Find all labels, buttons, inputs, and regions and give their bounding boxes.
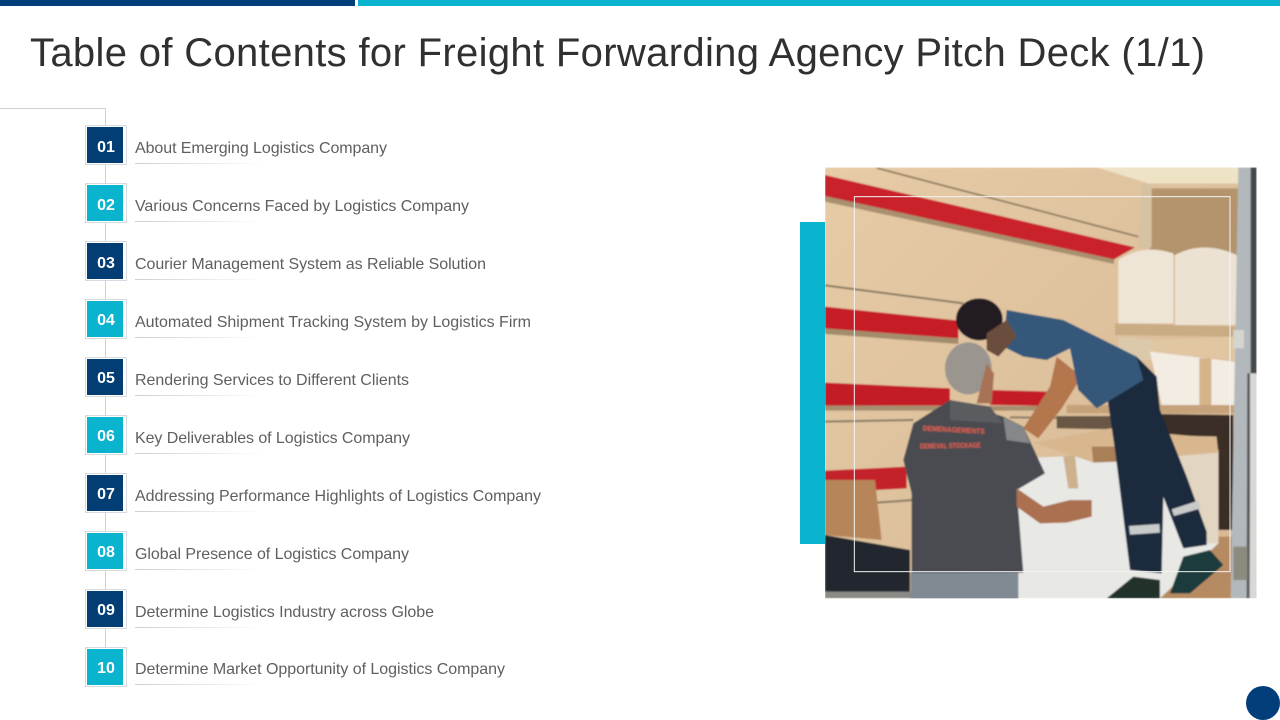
item 08: Global Presence of Logistics Company: [135, 546, 409, 563]
item 02: Various Concerns Faced by Logistics Company: [135, 198, 469, 215]
item 08: 08: [97, 544, 115, 561]
item 05: [86, 358, 409, 396]
item 09: 09: [97, 602, 115, 619]
item 02: [86, 184, 469, 222]
item 09: [86, 590, 434, 628]
item 05: 05: [97, 370, 115, 387]
item 04: Automated Shipment Tracking System by Logistics Firm: [135, 314, 531, 331]
item 03: [86, 242, 486, 280]
item 03: 03: [97, 255, 115, 272]
item 01: 01: [97, 139, 115, 156]
photo: two workers loading a truck: [825, 167, 1257, 599]
item 10: Determine Market Opportunity of Logistics Company: [135, 661, 505, 678]
item 10: [86, 648, 505, 686]
timeline connector line: [0, 108, 106, 650]
photo: two workers loading a truck: DEMEVAL STOCKAGE: [920, 441, 981, 451]
item 10: 10: [97, 660, 115, 677]
item 06: Key Deliverables of Logistics Company: [135, 430, 410, 447]
item 04: 04: [97, 312, 115, 329]
white inset frame on photo: [854, 197, 1230, 572]
top accent bar: [0, 0, 1280, 6]
photo: two workers loading a truck: DEMENAGEMENTS: [923, 424, 985, 436]
item 09: Determine Logistics Industry across Globe: [135, 604, 434, 621]
item 06: 06: [97, 428, 115, 445]
title: Table of Contents for Freight Forwarding Agency Pitch Deck (1/1): [30, 31, 1205, 75]
item 01: [86, 126, 387, 164]
item 01: About Emerging Logistics Company: [135, 140, 387, 157]
item 06: [86, 416, 410, 454]
item 07: 07: [97, 486, 115, 503]
item 03: Courier Management System as Reliable Solution: [135, 256, 486, 273]
contents list: [86, 126, 541, 686]
item 05: Rendering Services to Different Clients: [135, 372, 409, 389]
item 02: 02: [97, 197, 115, 214]
item 07: Addressing Performance Highlights of Logistics Company: [135, 488, 541, 505]
item 07: [86, 474, 541, 512]
corner circle: [1246, 686, 1280, 720]
teal accent block beside photo: [800, 222, 825, 544]
item 08: [86, 532, 409, 570]
item 04: [86, 300, 531, 338]
